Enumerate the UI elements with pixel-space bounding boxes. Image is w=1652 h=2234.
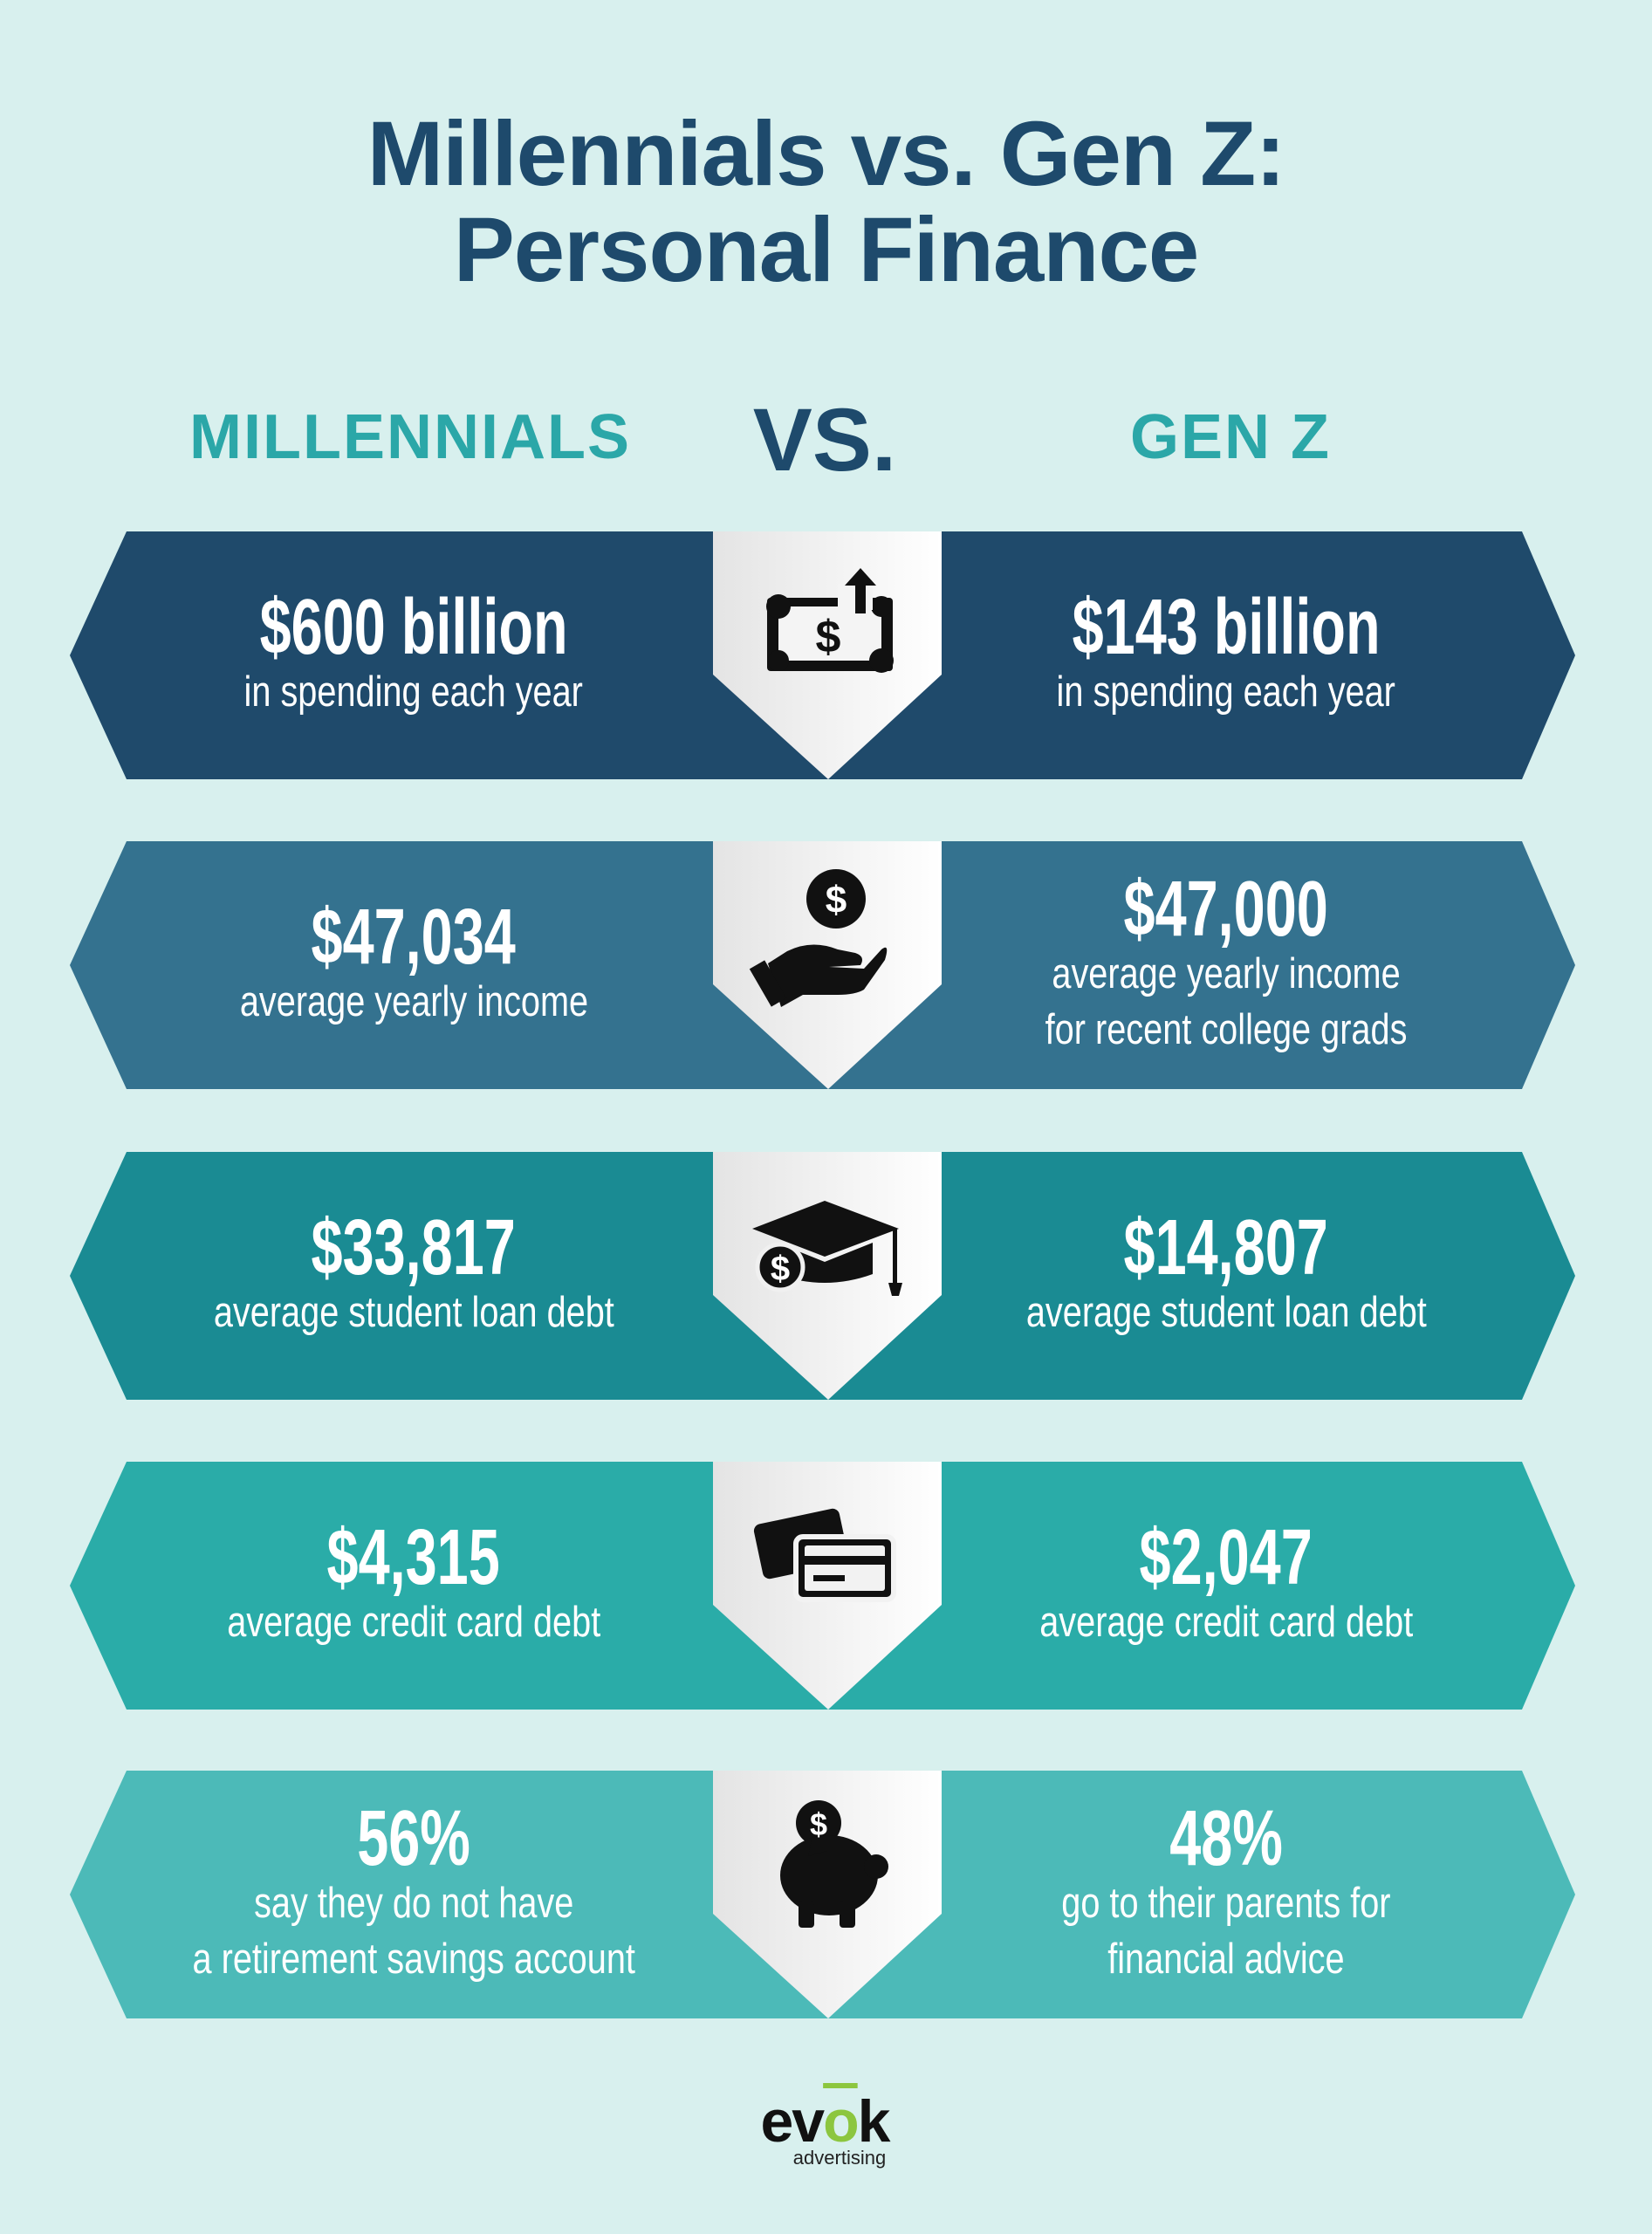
- band 4: credit card: [70, 1462, 1575, 1710]
- text: gen z advice: go to their parents for: [1061, 1880, 1391, 1927]
- text: millennials income: $47,034: [312, 894, 516, 981]
- text: millennials income: average yearly income: [239, 978, 588, 1025]
- text: gen z advice: financial advice: [1107, 1936, 1345, 1983]
- band 5: retirement / advice: $: [810, 1806, 827, 1842]
- band 5: retirement / advice: [70, 1771, 1575, 2018]
- logo: evok advertising: advertising: [793, 2147, 886, 2169]
- text: gen z student debt: $14,807: [1124, 1204, 1328, 1292]
- text: gen z credit card: average credit card debt: [1039, 1599, 1413, 1646]
- text: millennials retirement: [192, 1795, 635, 1983]
- band 3: student loan: $: [771, 1250, 790, 1288]
- text: millennials income: [239, 894, 588, 1025]
- band 2: income: $: [826, 879, 847, 922]
- text: millennials student debt: average student loan debt: [213, 1289, 614, 1336]
- text: millennials credit card: average credit card debt: [227, 1599, 600, 1646]
- band 2: income: [70, 841, 1575, 1089]
- band 3: student loan: [70, 1152, 1575, 1400]
- text: millennials credit card: [227, 1514, 600, 1646]
- text: gen z advice: [1061, 1795, 1391, 1983]
- logo: evok advertising: evok: [760, 2088, 888, 2155]
- text: gen z credit card: [1039, 1514, 1413, 1646]
- title: [367, 103, 1285, 301]
- text: gen z income: average yearly income: [1052, 950, 1401, 997]
- band 1: spending: $: [816, 612, 841, 662]
- text: gen z income: $47,000: [1124, 866, 1328, 953]
- text: millennials credit card: $4,315: [327, 1514, 500, 1601]
- text: gen z income: for recent college grads: [1045, 1006, 1407, 1053]
- text: millennials student debt: [213, 1204, 614, 1336]
- text: gen z spending: $143 billion: [1073, 584, 1380, 671]
- text: millennials student debt: $33,817: [312, 1204, 516, 1292]
- band 1: spending: [70, 531, 1575, 779]
- text: gen z spending: [1057, 584, 1395, 716]
- header: vs: VS.: [753, 390, 896, 490]
- text: gen z student debt: average student loan debt: [1025, 1289, 1426, 1336]
- text: millennials retirement: say they do not have: [254, 1880, 573, 1927]
- title: Millennials vs. Gen Z:: [367, 103, 1285, 205]
- header: gen z: GEN Z: [1130, 402, 1331, 472]
- text: gen z income: [1045, 866, 1407, 1053]
- text: millennials spending: [244, 584, 583, 716]
- text: gen z student debt: [1025, 1204, 1426, 1336]
- text: gen z spending: in spending each year: [1057, 668, 1395, 716]
- text: gen z advice: 48%: [1169, 1795, 1283, 1882]
- text: millennials retirement: 56%: [357, 1795, 470, 1882]
- title: Personal Finance: [454, 199, 1198, 301]
- text: gen z credit card: $2,047: [1140, 1514, 1313, 1601]
- text: millennials retirement: a retirement savings account: [192, 1936, 635, 1983]
- text: millennials spending: in spending each year: [244, 668, 583, 716]
- header: millennials: MILLENNIALS: [189, 402, 631, 472]
- text: millennials spending: $600 billion: [260, 584, 567, 671]
